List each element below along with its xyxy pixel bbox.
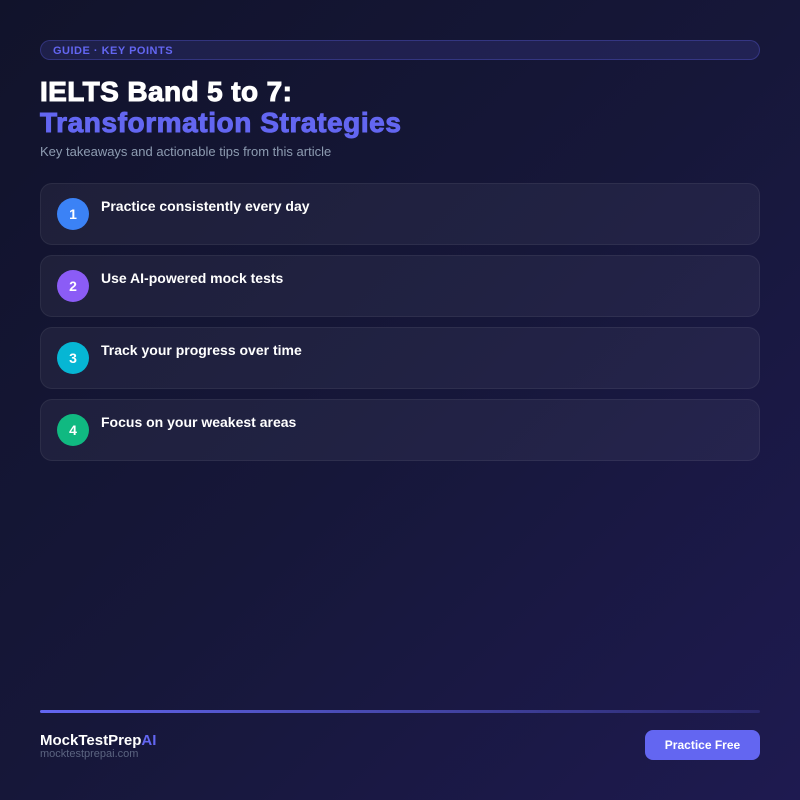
footer accent line — [40, 710, 760, 713]
icon: number 3: 3 — [69, 350, 77, 366]
badge: guide key points — [40, 40, 760, 60]
call to action button — [645, 730, 760, 760]
text: point 2: Use AI-powered mock tests — [101, 270, 283, 286]
icon: number 4: 4 — [69, 422, 77, 438]
panel: point 2 — [40, 255, 760, 317]
brand block — [40, 732, 156, 760]
title: Transformation Strategies — [40, 107, 401, 138]
text: point 4: Focus on your weakest areas — [101, 414, 296, 430]
panel: point 4 — [40, 399, 760, 461]
icon: number 1 — [57, 198, 89, 230]
brand name: MockTestPrepAI — [40, 732, 156, 749]
icon: number 2 — [57, 270, 89, 302]
icon: number 1: 1 — [69, 206, 77, 222]
panel: point 1 — [40, 183, 760, 245]
call to action button: Practice Free — [665, 738, 740, 752]
icon: number 4 — [57, 414, 89, 446]
badge: guide key points: GUIDE · KEY POINTS — [53, 45, 173, 57]
text: point 3: Track your progress over time — [101, 342, 302, 358]
icon: number 3 — [57, 342, 89, 374]
panel: point 3 — [40, 327, 760, 389]
icon: number 2: 2 — [69, 278, 77, 294]
title: IELTS Band 5 to 7: — [40, 76, 292, 107]
brand url: mocktestprepai.com — [40, 748, 138, 760]
subtitle: Key takeaways and actionable tips from this article — [40, 144, 331, 159]
title — [40, 76, 401, 138]
text: point 1: Practice consistently every day — [101, 198, 310, 214]
